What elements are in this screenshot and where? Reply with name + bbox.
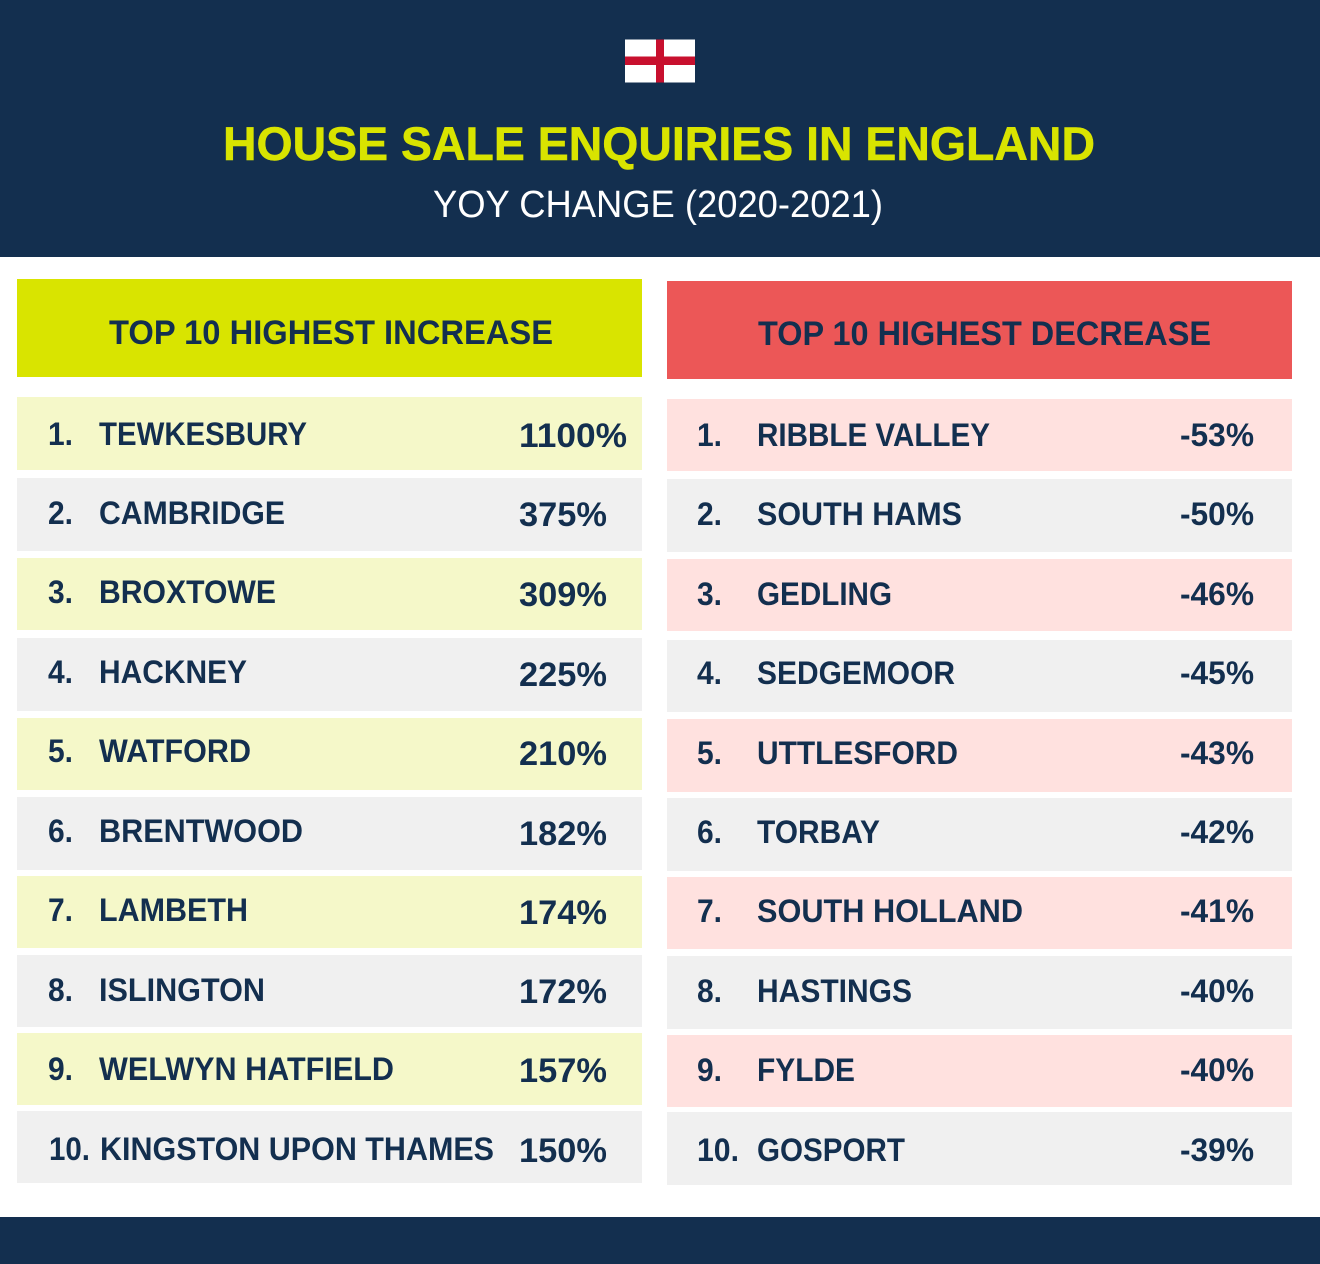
row: Welwyn Hatfield: WELWYN HATFIELD (99, 1051, 394, 1087)
row: Hastings: HASTINGS (757, 973, 912, 1009)
row: Sedgemoor: -45% (1180, 655, 1254, 691)
row: Lambeth: LAMBETH (99, 892, 248, 928)
row: Watford: 5. (48, 733, 73, 769)
row: Hastings: 8. (697, 973, 722, 1009)
row: South Holland: -41% (1180, 893, 1254, 929)
row: Islington (17, 955, 642, 1027)
row: South Holland (667, 877, 1292, 949)
row: South Hams: 2. (697, 496, 722, 532)
row: Lambeth (17, 876, 642, 948)
heading: highest increase: TOP 10 HIGHEST INCREASE (109, 314, 553, 352)
row: Hastings (667, 956, 1292, 1029)
row: Kingston upon Thames: 10. (49, 1131, 90, 1167)
row: South Holland: 7. (697, 893, 722, 929)
row: Sedgemoor: SEDGEMOOR (757, 655, 955, 691)
row: Tewkesbury (17, 397, 642, 470)
row: Fylde (667, 1035, 1292, 1107)
row: Islington: ISLINGTON (99, 972, 265, 1008)
row: Kingston upon Thames: KINGSTON UPON THAMES (100, 1131, 494, 1167)
row: Gedling: 3. (697, 576, 722, 612)
row: Gedling: -46% (1180, 576, 1254, 612)
row: Fylde: FYLDE (757, 1052, 855, 1088)
row: Gosport (667, 1112, 1292, 1185)
row: Kingston upon Thames (17, 1111, 642, 1183)
row: Watford: WATFORD (99, 733, 251, 769)
row: Islington: 8. (48, 972, 73, 1008)
row: Uttlesford (667, 719, 1292, 792)
row: Lambeth: 7. (48, 892, 73, 928)
row: Welwyn Hatfield: 9. (48, 1051, 73, 1087)
row: Brentwood: BRENTWOOD (99, 813, 303, 849)
row: Hackney (17, 638, 642, 711)
header band (0, 0, 1320, 257)
heading: highest increase (17, 279, 642, 377)
title: HOUSE SALE ENQUIRIES IN ENGLAND (223, 117, 1095, 170)
row: Hackney: 225% (519, 656, 607, 694)
row: Broxtowe: 3. (48, 574, 73, 610)
row: Uttlesford: -43% (1180, 735, 1254, 771)
row: South Hams: -50% (1180, 496, 1254, 532)
row: Torbay (667, 798, 1292, 871)
panel: top 10 highest decrease (667, 281, 1292, 1185)
row: Sedgemoor: 4. (697, 655, 722, 691)
row: Islington: 172% (519, 973, 607, 1011)
footer band (0, 1217, 1320, 1264)
row: Brentwood (17, 797, 642, 870)
row: Ribble Valley: RIBBLE VALLEY (757, 417, 990, 453)
row: Cambridge: CAMBRIDGE (99, 495, 285, 531)
row: Cambridge: 2. (48, 495, 73, 531)
row: Gedling (667, 559, 1292, 631)
icon: England flag (625, 40, 695, 82)
row: Hackney: HACKNEY (99, 654, 247, 690)
row: Gosport: GOSPORT (757, 1132, 905, 1168)
heading: highest decrease: TOP 10 HIGHEST DECREASE (758, 315, 1211, 353)
row: Cambridge: 375% (519, 496, 607, 534)
row: Ribble Valley: 1. (697, 417, 722, 453)
row: Uttlesford: UTTLESFORD (757, 735, 958, 771)
row: Gosport: 10. (697, 1132, 739, 1168)
subtitle: YOY CHANGE (2020-2021) (433, 184, 883, 226)
row: Fylde: 9. (697, 1052, 722, 1088)
row: Tewkesbury: 1. (48, 416, 73, 452)
row: Cambridge (17, 478, 642, 551)
row: Gedling: GEDLING (757, 576, 892, 612)
row: Watford (17, 718, 642, 790)
row: Torbay: -42% (1180, 814, 1254, 850)
row: Torbay: TORBAY (757, 814, 880, 850)
row: Torbay: 6. (697, 814, 722, 850)
panel: top 10 highest increase (17, 279, 642, 1183)
row: Watford: 210% (519, 735, 607, 773)
row: Tewkesbury: 1100% (519, 417, 627, 455)
row: Uttlesford: 5. (697, 735, 722, 771)
row: Tewkesbury: TEWKESBURY (99, 416, 307, 452)
row: Brentwood: 6. (48, 813, 73, 849)
row: Ribble Valley: -53% (1180, 417, 1254, 453)
row: Sedgemoor (667, 640, 1292, 712)
row: Broxtowe: 309% (519, 576, 607, 614)
row: South Hams: SOUTH HAMS (757, 496, 962, 532)
row: Fylde: -40% (1180, 1052, 1254, 1088)
row: Hackney: 4. (48, 654, 73, 690)
row: Broxtowe: BROXTOWE (99, 574, 276, 610)
row: Welwyn Hatfield (17, 1033, 642, 1105)
row: South Holland: SOUTH HOLLAND (757, 893, 1023, 929)
row: Ribble Valley (667, 399, 1292, 471)
row: South Hams (667, 479, 1292, 552)
row: Hastings: -40% (1180, 973, 1254, 1009)
row: Lambeth: 174% (519, 894, 607, 932)
row: Welwyn Hatfield: 157% (519, 1052, 607, 1090)
row: Gosport: -39% (1180, 1132, 1254, 1168)
heading: highest decrease (667, 281, 1292, 379)
row: Broxtowe (17, 558, 642, 630)
row: Brentwood: 182% (519, 815, 607, 853)
row: Kingston upon Thames: 150% (519, 1132, 607, 1170)
